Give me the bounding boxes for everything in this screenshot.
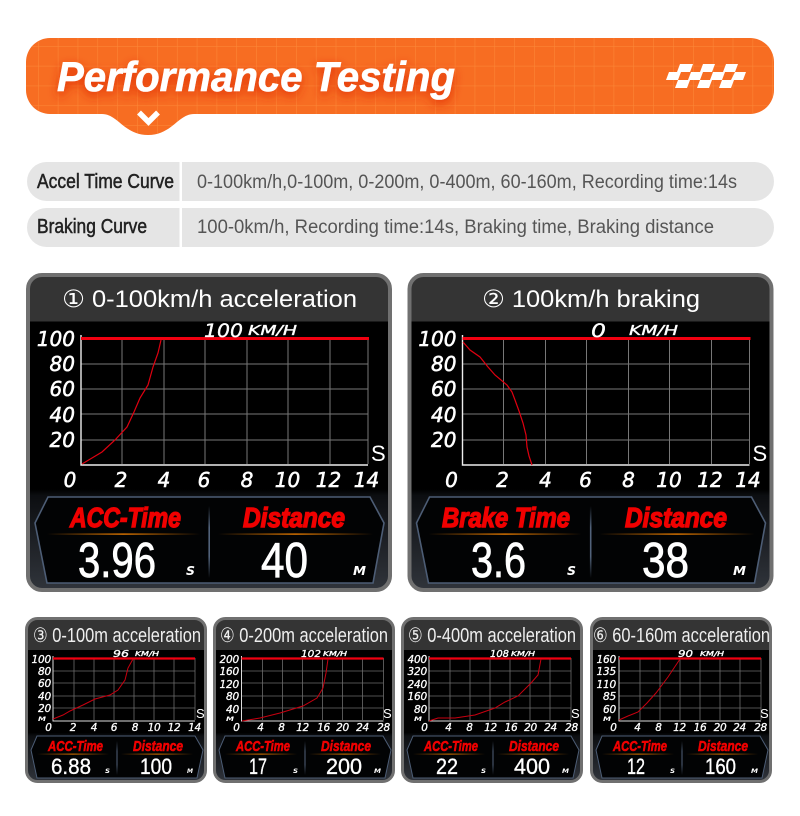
y axis labels: 20 [431,428,456,452]
x axis labels: 10 [275,468,300,492]
x axis labels: 12 [316,468,341,492]
speed readout: KM/H [323,650,348,658]
spec row: braking curve [27,208,774,247]
acceleration curve [619,659,680,720]
metric: time: Brake Time [442,502,570,533]
y axis labels [32,654,52,723]
x axis labels: 12 [484,722,497,734]
y axis labels: 40 [38,691,52,703]
metric: time [235,738,298,779]
metric: time [47,738,110,779]
spec row: accel time curve: Accel Time Curve [37,171,174,193]
panel: 0-200m acceleration [214,618,394,782]
speed readout [490,649,536,660]
acceleration curve [429,659,541,721]
metric: time: S [293,768,298,775]
x axis labels: 0 [233,722,240,734]
y axis labels: 40 [50,403,75,427]
y axis labels: M [226,716,234,723]
y axis labels: 160 [408,691,428,703]
metric: time: ACC-Time [235,738,290,755]
x axis labels [610,722,767,734]
x axis labels: 4 [257,722,264,734]
spec row: braking curve: 100-0km/h, Recording time:14s, Braking time, Braking distance [197,217,714,238]
panel title: ③ 0-100m acceleration [33,625,201,647]
x axis labels: 24 [733,722,746,734]
metric: time: S [670,768,675,775]
x axis labels: 8 [132,722,139,734]
metric: distance [133,738,193,779]
axis unit: S [371,441,386,466]
x axis labels: 8 [241,468,253,492]
metric: distance: Distance [321,738,371,755]
panel title: ④ 0-200m acceleration [220,625,388,647]
x axis labels: 4 [91,722,97,734]
x axis labels: 4 [158,468,170,492]
x axis labels: 16 [694,722,707,734]
x axis labels: 2 [70,722,77,734]
panel title: ① 0-100km/h acceleration [62,286,357,313]
y axis labels: 400 [408,654,428,666]
metric: distance: M [751,768,758,775]
metric: time [612,738,675,779]
y axis labels: M [38,716,46,723]
spec row: braking curve: Braking Curve [37,216,147,238]
x axis labels: 0 [610,722,617,734]
metric: distance: 200 [326,754,362,779]
metric: time: ACC-Time [47,738,103,755]
x axis labels: 4 [539,468,552,492]
y axis labels: 40 [226,704,240,716]
metric: distance: M [562,768,569,775]
y axis labels [37,327,75,452]
x axis labels: 0 [45,722,52,734]
panel: 0-100m acceleration [26,618,206,782]
x axis labels: 20 [336,722,349,734]
acceleration curve [53,659,133,719]
speed readout: 0 [591,320,606,342]
x axis labels [421,722,578,734]
x axis labels: 2 [115,468,127,492]
metric: distance [321,738,381,779]
metric: distance [509,738,569,779]
x axis labels: 20 [714,722,727,734]
x axis labels: 12 [296,722,309,734]
y axis labels: 80 [38,666,52,678]
x axis labels: 8 [622,468,635,492]
y axis labels: 120 [220,679,240,691]
axis unit: S [196,706,205,721]
header banner [26,38,774,135]
x axis labels: 12 [673,722,686,734]
metric: distance [625,502,746,588]
metric: time: 17 [249,754,267,779]
metric: distance: 38 [642,534,689,588]
speed readout: 108 [490,649,509,660]
y axis labels: 60 [603,704,617,716]
x axis labels [45,722,201,734]
panel title: ⑤ 0-400m acceleration [408,625,576,647]
x axis labels: 0 [64,468,76,492]
metric: time: S [186,564,195,578]
y axis labels: 20 [50,428,75,452]
y axis labels: 100 [32,654,52,666]
axis unit: S [571,706,580,721]
metric: time [442,502,576,588]
metric: time [423,738,486,779]
y axis labels: 80 [226,691,240,703]
x axis labels: 14 [354,468,379,492]
y axis labels: 100 [37,327,75,351]
metric: distance: Distance [509,738,559,755]
axis unit: S [760,706,769,721]
x axis labels: 0 [445,468,458,492]
y axis labels: 100 [418,327,456,351]
x axis labels: 10 [656,468,682,492]
y axis labels: 200 [220,654,240,666]
x axis labels: 8 [655,722,662,734]
speed readout: KM/H [511,650,536,658]
x axis labels: 0 [421,722,428,734]
speed readout [678,649,725,660]
metric: distance: M [353,564,366,578]
y axis labels: 160 [597,654,617,666]
x axis labels: 2 [496,468,509,492]
y axis labels: 320 [408,666,428,678]
metric: distance: Distance [243,502,345,533]
metric: distance: Distance [625,502,727,533]
metric: time: S [105,768,110,775]
x axis labels: 4 [634,722,641,734]
metric: time: 22 [436,754,458,779]
y axis labels: 60 [38,678,52,690]
y axis labels: 40 [431,403,456,427]
metric: distance: 160 [705,754,736,779]
axis unit: S [752,441,767,466]
speed readout: 90 [678,649,693,660]
y axis labels: 240 [408,679,428,691]
speed readout: 102 [301,649,321,660]
panel title: ② 100km/h braking [482,286,700,313]
x axis labels: 8 [278,722,285,734]
braking curve [463,342,532,465]
x axis labels [445,468,761,492]
metric: time: S [567,564,576,578]
speed readout: KM/H [248,324,297,339]
panel: 100km/h braking [410,275,772,590]
metric: time: 3.96 [78,534,156,588]
metric: time: ACC-Time [423,738,478,755]
x axis labels: 6 [198,468,210,492]
metric: distance [243,502,366,588]
y axis labels: M [603,716,611,723]
y axis labels: 85 [603,691,617,703]
y axis labels [408,654,428,723]
panel: 0-400m acceleration [402,618,582,782]
y axis labels: 160 [220,666,240,678]
metric: distance: 400 [514,754,550,779]
x axis labels: 12 [697,468,723,492]
speed readout: KM/H [135,650,160,658]
metric: time [69,502,195,588]
x axis labels: 4 [445,722,452,734]
y axis labels: 110 [597,679,617,691]
acceleration curve [82,340,161,464]
x axis labels: 16 [505,722,518,734]
x axis labels: 8 [466,722,473,734]
x axis labels [233,722,390,734]
metric: distance: Distance [698,738,748,755]
speed readout: 96 [113,649,129,660]
x axis labels: 14 [188,722,201,734]
speed readout [301,649,348,660]
y axis labels [418,327,456,452]
axis unit: S [383,706,392,721]
x axis labels: 24 [356,722,369,734]
icon: chevron down [139,112,158,122]
x axis labels: 28 [754,722,767,734]
acceleration curve [242,659,328,721]
metric: time: ACC-Time [612,738,667,755]
y axis labels: 80 [414,704,428,716]
x axis labels: 24 [544,722,557,734]
metric: distance: M [187,768,193,775]
panel: 60-160m acceleration [592,618,770,782]
metric: distance: 40 [261,534,308,588]
metric: time: 3.6 [471,534,526,588]
y axis labels: 60 [50,377,75,401]
y axis labels: 80 [431,352,456,376]
metric: distance [698,738,758,779]
y axis labels [597,654,617,723]
x axis labels: 6 [111,722,118,734]
x axis labels: 28 [377,722,390,734]
speed readout: KM/H [629,324,678,339]
metric: distance: M [374,768,381,775]
x axis labels: 20 [524,722,537,734]
y axis labels: 60 [431,377,456,401]
speed readout: 100 [204,320,243,342]
y axis labels [220,654,240,723]
metric: time: S [481,768,486,775]
metric: time: 12 [627,754,645,779]
y axis labels: 135 [597,666,617,678]
speed readout [204,320,297,342]
x axis labels [64,468,379,492]
metric: distance: M [733,564,746,578]
speed readout [591,320,678,342]
icon: checkered flag [666,64,746,88]
speed readout [113,649,160,660]
spec row: accel time curve [27,162,774,201]
metric: distance: Distance [133,738,183,755]
x axis labels: 6 [579,468,592,492]
x axis labels: 16 [317,722,330,734]
x axis labels: 10 [148,722,161,734]
y axis labels: 20 [38,703,52,715]
x axis labels: 14 [735,468,761,492]
y axis labels: 80 [50,352,75,376]
x axis labels: 12 [168,722,181,734]
metric: time: ACC-Time [69,502,181,533]
metric: time: 6.88 [51,754,91,779]
speed readout: KM/H [700,650,725,658]
title: Performance Testing [57,53,455,100]
x axis labels: 28 [565,722,578,734]
y axis labels: M [414,716,422,723]
panel: 0-100km/h acceleration [28,275,390,590]
spec row: accel time curve: 0-100km/h,0-100m, 0-200m, 0-400m, 60-160m, Recording time:14s [197,172,737,193]
metric: distance: 100 [140,754,172,779]
